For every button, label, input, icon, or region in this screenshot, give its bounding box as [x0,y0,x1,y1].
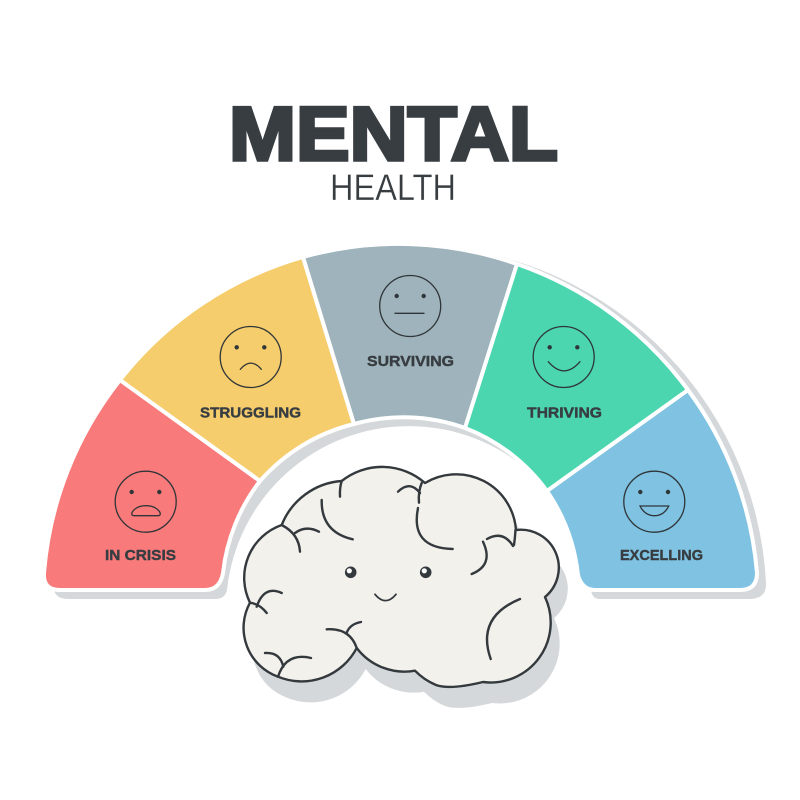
segment: struggling [120,257,354,481]
icon: in crisis face [115,471,176,532]
gauge [44,244,757,590]
brain smile [375,594,396,601]
brain body [244,467,559,687]
brain illustration [244,467,568,708]
icon: thriving face [533,326,594,388]
icon: surviving face [380,276,441,336]
icon: excelling face [624,471,685,532]
title [229,92,558,208]
segment: in crisis [44,380,260,590]
gauge shadow [53,245,766,599]
label: excelling: EXCELLING [620,547,703,564]
segment: thriving [465,264,688,491]
icon: struggling face [220,326,281,388]
brain right eye [420,566,432,578]
label: in crisis: IN CRISIS [105,547,176,564]
brain folds [250,481,520,677]
label: thriving: THRIVING [527,404,602,422]
label: surviving: SURVIVING [367,353,454,370]
brain left eye [345,566,357,578]
brain shadow [253,488,568,708]
heading: MENTAL: MENTAL [229,92,558,177]
heading: HEALTH: HEALTH [330,166,456,208]
segment: excelling [547,390,757,590]
segment: surviving [303,244,517,428]
label: struggling: STRUGGLING [200,404,301,422]
